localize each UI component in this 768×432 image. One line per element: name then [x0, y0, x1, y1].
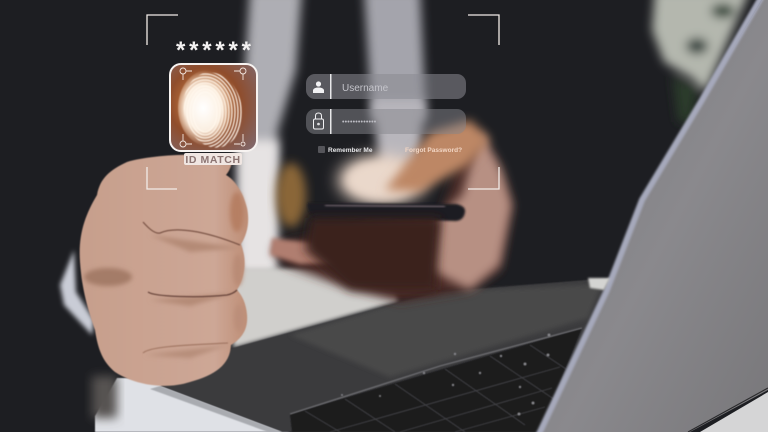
username field: [306, 74, 466, 99]
white shirt cuff: [60, 250, 94, 335]
fingerprint: [178, 71, 242, 148]
white desk surface: [92, 268, 768, 432]
blurred background plant top right: [652, 0, 750, 122]
finger shading: [84, 192, 244, 358]
laptop lid: [538, 0, 768, 432]
fingerprint scan panel: [166, 64, 257, 159]
forgot password link: Forgot Password?: [405, 147, 462, 154]
smartphone: [305, 203, 465, 290]
icon: padlock: [314, 113, 324, 129]
scan targets: [180, 68, 246, 147]
finger creases: [143, 222, 240, 353]
icon: user: [313, 81, 324, 93]
username field: Username: [342, 83, 389, 94]
ID match label: ID MATCH: [185, 154, 241, 166]
remember me checkbox: Remember Me: [328, 147, 373, 154]
hand holding phone: [270, 120, 512, 302]
password field: •••••••••••••: [342, 119, 377, 126]
clenched fist with raised thumb: [80, 155, 248, 386]
blurred shirt and tie stripes: [238, 0, 426, 275]
password field: [306, 109, 466, 134]
password asterisks: ******: [176, 37, 252, 64]
corner brackets: [147, 15, 499, 189]
laptop keyboard: [290, 328, 582, 432]
laptop base and trackpad: [150, 278, 610, 432]
